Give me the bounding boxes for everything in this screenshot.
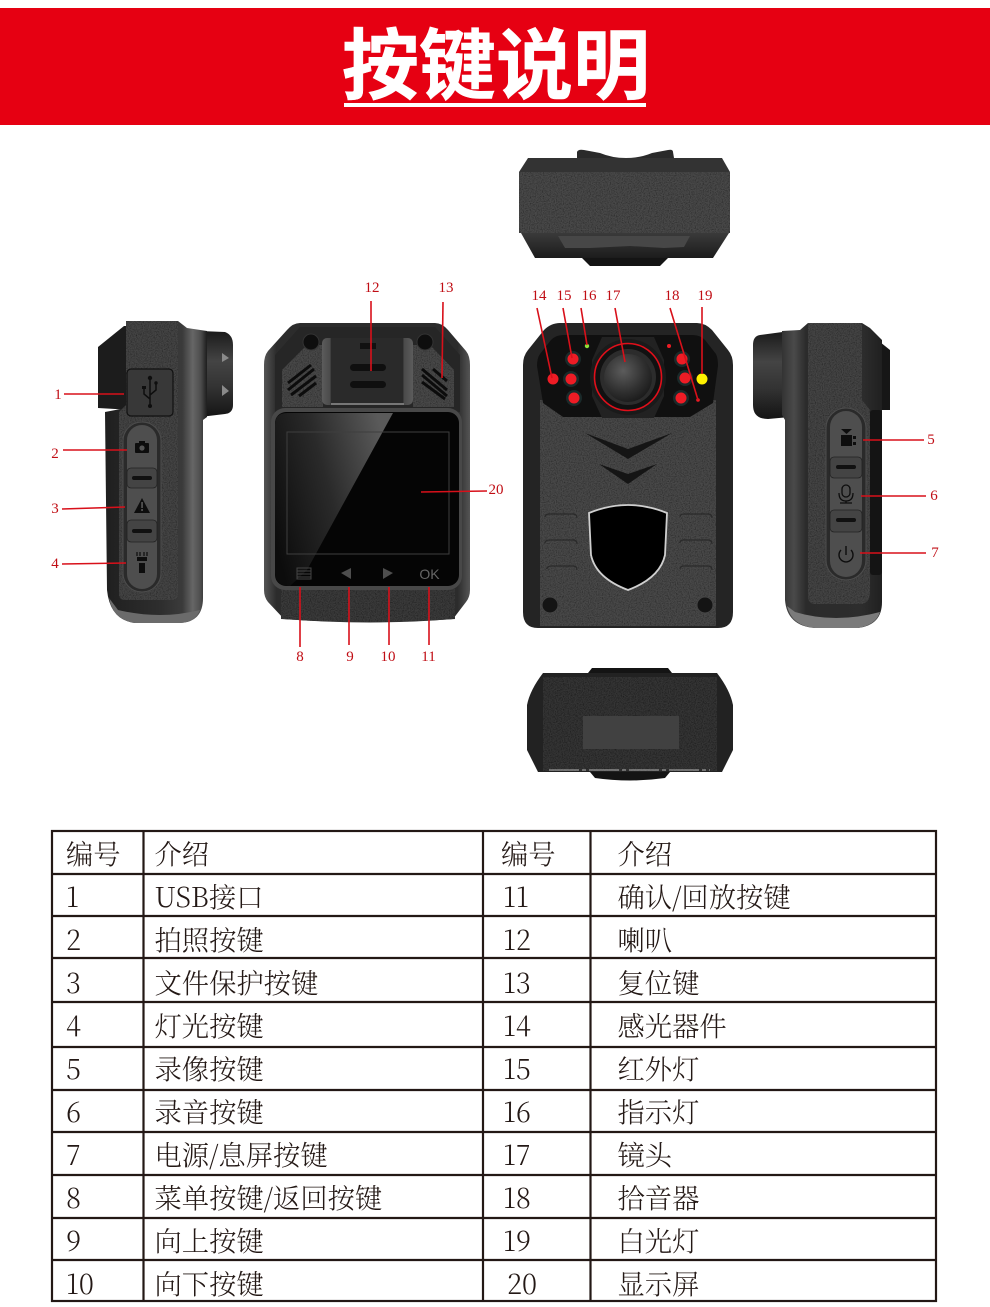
callout 7: 7 (931, 545, 939, 561)
callout 8 (296, 587, 304, 665)
row 8 and 18: 拾音器 (618, 1177, 699, 1216)
row 5 and 15: 15 (503, 1048, 531, 1087)
row 10 and 20: 10 (66, 1263, 94, 1302)
row 7 and 17: 镜头 (618, 1134, 673, 1173)
screws (542, 597, 713, 613)
icon: power (839, 546, 853, 562)
row 10 and 20 (66, 1263, 699, 1302)
row 6 and 16 (66, 1091, 699, 1130)
icon: left arrow (341, 568, 351, 579)
row 8 and 18 (66, 1177, 699, 1216)
callout 18: 18 (664, 288, 680, 304)
grip slots (545, 514, 712, 570)
white light (696, 374, 708, 384)
callout 3 (51, 501, 125, 517)
row 2 and 12 (66, 919, 672, 958)
callout 13 (438, 280, 454, 378)
device: bottom view (527, 668, 733, 780)
row 8 and 18: 菜单按键/返回按键 (154, 1177, 382, 1216)
row 10 and 20: 显示屏 (618, 1263, 699, 1302)
speaker grille left (282, 345, 323, 407)
row 3 and 13: 13 (503, 962, 531, 1001)
callout 6 (861, 488, 938, 504)
row 2 and 12: 2 (66, 919, 81, 958)
speaker clip (322, 338, 413, 405)
row 7 and 17 (66, 1134, 673, 1173)
callout 11: 11 (421, 649, 436, 665)
row 5 and 15 (66, 1048, 699, 1087)
title banner (0, 5, 990, 125)
callout labels (51, 280, 939, 665)
callout 8: 8 (296, 649, 304, 665)
row 6 and 16: 指示灯 (618, 1091, 699, 1130)
callout 17 (606, 288, 625, 362)
row 6 and 16: 6 (66, 1091, 81, 1130)
callout 20: 20 (488, 482, 504, 498)
callout 12: 12 (364, 280, 380, 296)
callout 3: 3 (51, 501, 59, 517)
lens (590, 337, 666, 418)
callout 4: 4 (51, 556, 59, 572)
callout 9 (346, 587, 354, 665)
icon: right arrow (383, 568, 393, 579)
shield badge (589, 505, 667, 590)
row 2 and 12: 12 (503, 919, 531, 958)
row 7 and 17: 17 (503, 1134, 531, 1173)
row 9 and 19: 9 (66, 1220, 81, 1259)
row 9 and 19: 19 (503, 1220, 531, 1259)
row 3 and 13: 复位键 (618, 962, 699, 1001)
row 1 and 11: USB接口 (154, 876, 263, 915)
row 4 and 14 (66, 1005, 727, 1044)
icon: camera (135, 441, 149, 453)
callout 4 (51, 556, 126, 572)
table header: 介绍 (618, 833, 672, 872)
callout 5 (863, 432, 935, 448)
callout 11 (421, 587, 436, 665)
icon: warning triangle (134, 498, 150, 513)
table header: 编号 (501, 833, 556, 872)
row 1 and 11: 11 (503, 876, 529, 915)
callout 2 (51, 446, 127, 462)
row 8 and 18: 8 (66, 1177, 81, 1216)
callout 5: 5 (927, 432, 935, 448)
OK label: OK (419, 566, 440, 582)
callout 14: 14 (532, 288, 547, 304)
row 8 and 18: 18 (503, 1177, 531, 1216)
row 5 and 15: 5 (66, 1048, 81, 1087)
speaker grille right (413, 345, 454, 407)
callout 14 (532, 288, 552, 378)
row 4 and 14: 4 (66, 1005, 81, 1044)
row 1 and 11 (66, 876, 791, 915)
callout 19 (698, 288, 712, 374)
callout 19: 19 (698, 288, 712, 304)
display screen (271, 408, 462, 590)
row 1 and 11: 确认/回放按键 (618, 876, 791, 915)
callout 13: 13 (438, 280, 454, 296)
table header: 介绍 (154, 833, 209, 872)
callout 15 (556, 288, 572, 358)
row 2 and 12: 拍照按键 (154, 919, 264, 958)
title: 按键说明 (342, 5, 650, 116)
row 9 and 19 (66, 1220, 699, 1259)
row 9 and 19: 白光灯 (618, 1220, 699, 1259)
callout 10 (380, 587, 396, 665)
row 1 and 11: 1 (66, 876, 79, 915)
table header (66, 833, 672, 872)
row 4 and 14: 感光器件 (618, 1005, 727, 1044)
device: front view with lens (523, 323, 733, 628)
icon: USB port cover (127, 369, 173, 416)
row 9 and 19: 向上按键 (154, 1220, 264, 1259)
callout 2: 2 (51, 446, 59, 462)
device: right side view (753, 323, 890, 628)
icon: menu (297, 568, 311, 579)
screws (303, 334, 433, 350)
callout 12 (364, 280, 380, 371)
icon: video camera (841, 429, 856, 446)
row 3 and 13: 3 (66, 962, 81, 1001)
row 7 and 17: 7 (66, 1134, 81, 1173)
table header: 编号 (66, 833, 121, 872)
row 4 and 14: 14 (503, 1005, 531, 1044)
icon: microphone (839, 485, 853, 503)
callout 16 (581, 288, 597, 345)
leather base (281, 587, 455, 622)
callout 10: 10 (380, 649, 396, 665)
callout 7 (860, 545, 939, 561)
key description table (52, 831, 936, 1302)
callout 1: 1 (54, 387, 62, 403)
infrared LEDs (548, 344, 700, 406)
row 6 and 16: 录音按键 (154, 1091, 264, 1130)
callout 15: 15 (556, 288, 572, 304)
device: back view with screen (264, 323, 470, 622)
row 5 and 15: 红外灯 (618, 1048, 699, 1087)
callout 17: 17 (606, 288, 621, 304)
icon: flashlight (137, 552, 147, 573)
row 5 and 15: 录像按键 (154, 1048, 264, 1087)
row 4 and 14: 灯光按键 (154, 1005, 264, 1044)
side buttons: photo, protect, light (123, 422, 161, 592)
row 3 and 13 (66, 962, 699, 1001)
callout 9: 9 (346, 649, 354, 665)
device: left side view (98, 321, 233, 623)
indicator light (585, 344, 589, 348)
side buttons: record, audio, power (826, 408, 866, 580)
row 10 and 20: 向下按键 (154, 1263, 264, 1302)
device: top view (519, 150, 730, 266)
callout 6: 6 (930, 488, 938, 504)
row 2 and 12: 喇叭 (618, 919, 672, 958)
callout 20 (421, 482, 504, 498)
row 3 and 13: 文件保护按键 (154, 962, 318, 1001)
chevrons (585, 433, 672, 484)
callout 16: 16 (582, 288, 597, 304)
row 10 and 20: 20 (507, 1263, 537, 1302)
table grid (52, 831, 936, 1301)
row 6 and 16: 16 (503, 1091, 531, 1130)
callout 1 (54, 387, 124, 403)
row 7 and 17: 电源/息屏按键 (154, 1134, 328, 1173)
callout 18 (664, 288, 698, 400)
